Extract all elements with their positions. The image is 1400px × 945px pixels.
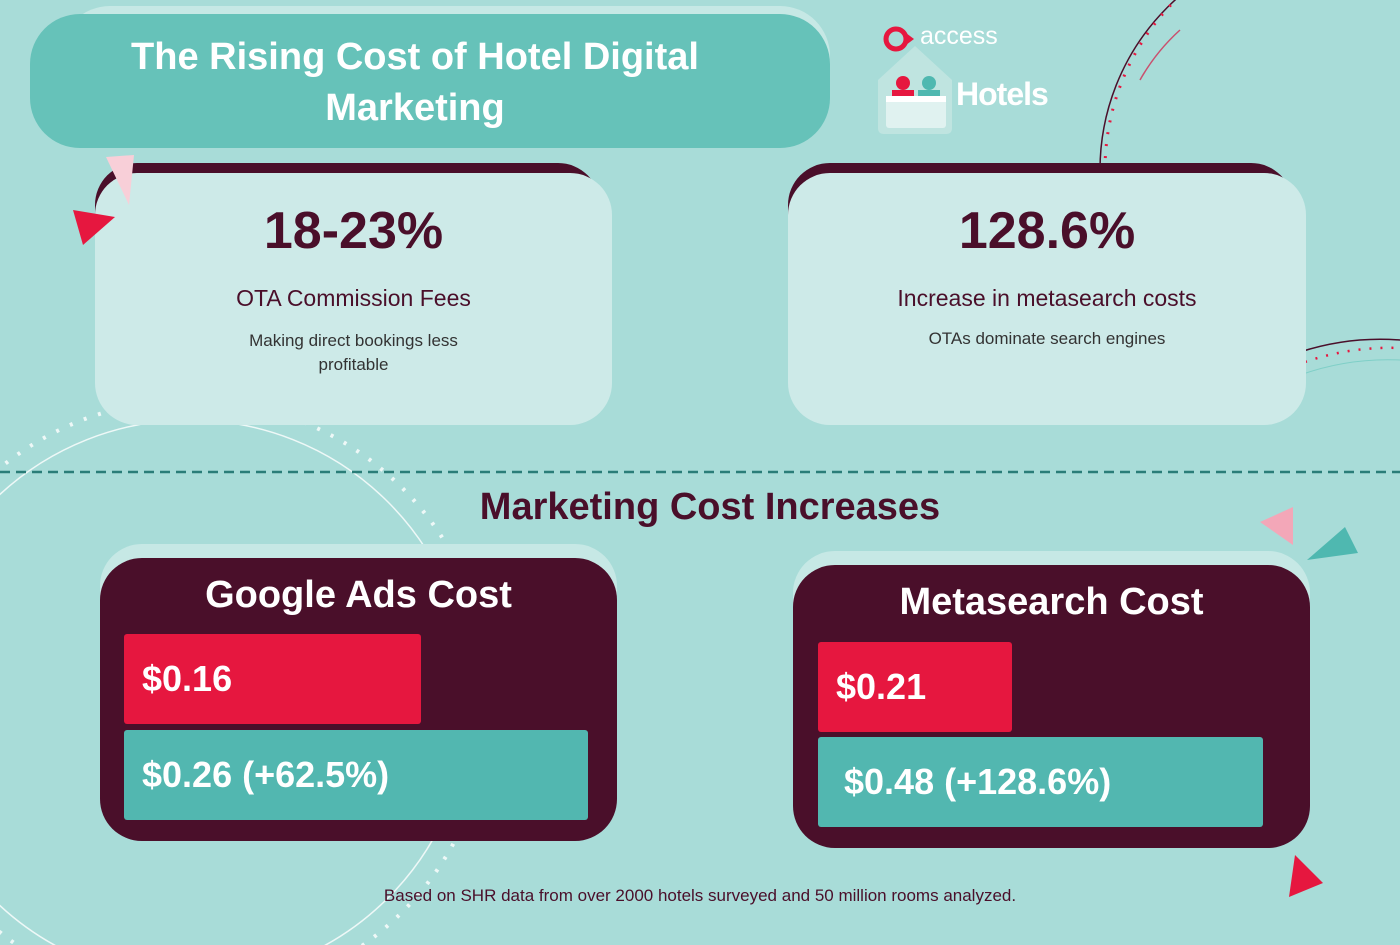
panel: google ads: $0.16	[142, 658, 232, 699]
card: OTA commission	[95, 163, 612, 425]
card: OTA commission: Making direct bookings less	[249, 331, 458, 350]
title banner	[30, 6, 830, 148]
card: OTA commission: profitable	[319, 355, 388, 374]
card: metasearch increase: 128.6%	[959, 202, 1135, 260]
logo	[878, 22, 1048, 134]
panel: google ads: $0.26 (+62.5%)	[142, 754, 389, 795]
panel: metasearch: $0.21	[836, 666, 926, 707]
logo: access	[920, 22, 998, 50]
panel: metasearch: $0.48 (+128.6%)	[844, 761, 1111, 802]
title banner: The Rising Cost of Hotel Digital	[131, 36, 699, 78]
icon: triangles top-left	[73, 155, 134, 245]
title banner: Marketing	[325, 87, 505, 129]
logo: Hotels	[956, 76, 1048, 112]
card: OTA commission: OTA Commission Fees	[236, 285, 471, 311]
panel: metasearch: Metasearch Cost	[899, 581, 1204, 623]
card: OTA commission: 18-23%	[264, 202, 443, 260]
icon: triangles right	[1260, 507, 1358, 560]
card: metasearch increase: Increase in metasearch costs	[897, 285, 1197, 311]
card: metasearch increase	[788, 163, 1306, 425]
footnote: Based on SHR data from over 2000 hotels surveyed and 50 million rooms analyzed.	[384, 886, 1016, 905]
icon: triangle bottom right	[1289, 855, 1323, 897]
card: metasearch increase: OTAs dominate search engines	[929, 329, 1165, 348]
panel: google ads: Google Ads Cost	[205, 574, 512, 616]
panel: google ads	[100, 544, 617, 841]
section heading: Marketing Cost Increases	[480, 486, 940, 528]
panel: metasearch	[793, 551, 1310, 848]
